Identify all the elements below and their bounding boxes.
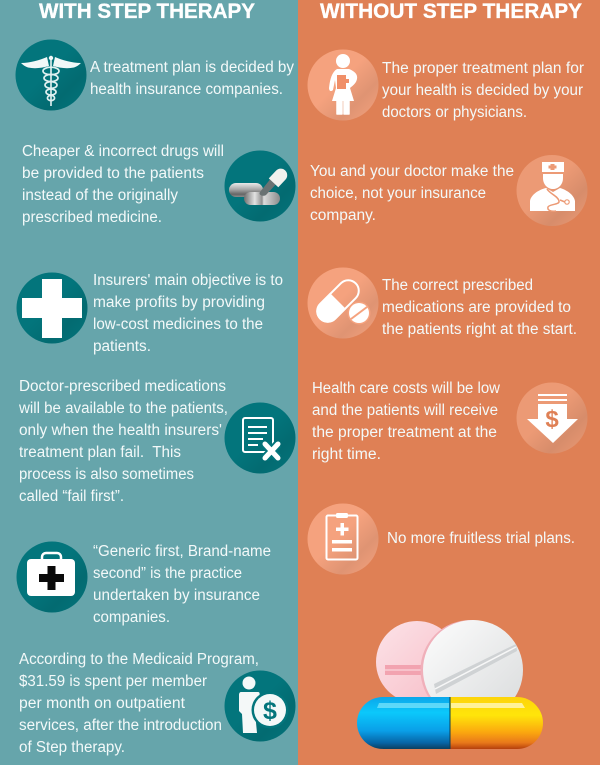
text: correct medications: medications are provided to [382, 299, 571, 316]
text: generic first [93, 543, 271, 626]
text: fail first [18, 378, 228, 505]
text: correct medications: The correct prescribed [382, 277, 533, 294]
icon: capsule and tablet [308, 268, 378, 338]
text: fail first: treatment plan fail. This [19, 444, 181, 461]
text: generic first: undertaken by insurance [93, 587, 260, 604]
text: you and your doctor choose: choice, not your insurance [310, 185, 486, 202]
text: generic first: companies. [93, 609, 170, 626]
text: cheaper drugs: instead of the originally [22, 187, 178, 204]
icon: medical plus [16, 272, 88, 344]
text: medicaid spending: According to the Medicaid Program, [19, 651, 259, 668]
text: fail first: called “fail first”. [19, 488, 124, 505]
icon: down arrow with dollar: $ [545, 406, 559, 433]
text: no more trial plans: No more fruitless trial plans. [387, 530, 575, 547]
text: treatment plan decided by doctors: doctors or physicians. [382, 104, 527, 121]
text: correct medications [382, 277, 577, 338]
text: treatment plan decided by doctors [382, 60, 584, 121]
text: treatment plan decided by insurers: health insurance companies. [90, 81, 283, 98]
icon: document with x [224, 402, 296, 474]
text: generic first: “Generic first, Brand-name [93, 543, 271, 560]
text: treatment plan decided by doctors: The proper treatment plan for [382, 60, 584, 77]
white tablet [420, 620, 523, 720]
text: insurers main objective [93, 272, 283, 355]
text: medicaid spending: services, after the introduction [19, 717, 222, 734]
icon: physician with clipboard [308, 50, 378, 120]
icon: grey capsules [224, 150, 296, 222]
text: cheaper drugs [22, 143, 224, 226]
text: low health care costs: the proper treatment at the [312, 424, 497, 441]
icon: first aid kit [16, 542, 88, 612]
text: cheaper drugs: be provided to the patients [22, 165, 204, 182]
text: medicaid spending: of Step therapy. [19, 739, 125, 756]
text: fail first: will be available to the patients, [18, 400, 228, 417]
icon: clipboard [308, 504, 378, 574]
icon: down arrow with dollar [516, 382, 588, 454]
illustration: tablets and capsule [357, 620, 543, 749]
text: you and your doctor choose [310, 163, 514, 224]
text: low health care costs [312, 380, 501, 463]
text: correct medications: the patients right at the start. [382, 321, 577, 338]
text: insurers main objective: make profits by providing [93, 294, 265, 311]
text: medicaid spending: per month on outpatient [19, 695, 186, 712]
icon: doctor with stethoscope [516, 155, 588, 226]
text: fail first: process is also sometimes [19, 466, 194, 483]
text: low health care costs: and the patients will receive [312, 402, 498, 419]
text: cheaper drugs: Cheaper & incorrect drugs will [22, 143, 224, 160]
text: medicaid spending: $31.59 is spent per member [19, 673, 207, 690]
text: treatment plan decided by doctors: your health is decided by your [382, 82, 583, 99]
text: insurers main objective: patients. [93, 338, 151, 355]
text: you and your doctor choose: company. [310, 207, 376, 224]
two-tone capsule [357, 697, 543, 749]
text: generic first: second” is the practice [93, 565, 242, 582]
text: you and your doctor choose: You and your doctor make the [310, 163, 514, 180]
icon: caduceus [16, 40, 86, 110]
text: cheaper drugs: prescribed medicine. [22, 209, 162, 226]
text: insurers main objective: Insurers' main objective is to [93, 272, 283, 289]
pink tablet [376, 621, 458, 703]
text: treatment plan decided by insurers [90, 59, 294, 98]
text: low health care costs: right time. [312, 446, 381, 463]
text: fail first: Doctor-prescribed medications [19, 378, 226, 395]
text: low health care costs: Health care costs will be low [312, 380, 501, 397]
icon: person with dollar coin: $ [263, 697, 277, 725]
icon: person with dollar coin [224, 670, 296, 742]
panel: without step therapy [298, 0, 600, 765]
text: fail first: only when the health insurers' [19, 422, 222, 439]
text: insurers main objective: low-cost medicines to the [93, 316, 263, 333]
panel: with step therapy [0, 0, 298, 765]
text: treatment plan decided by insurers: A treatment plan is decided by [90, 59, 294, 76]
text: medicaid spending [19, 651, 259, 756]
